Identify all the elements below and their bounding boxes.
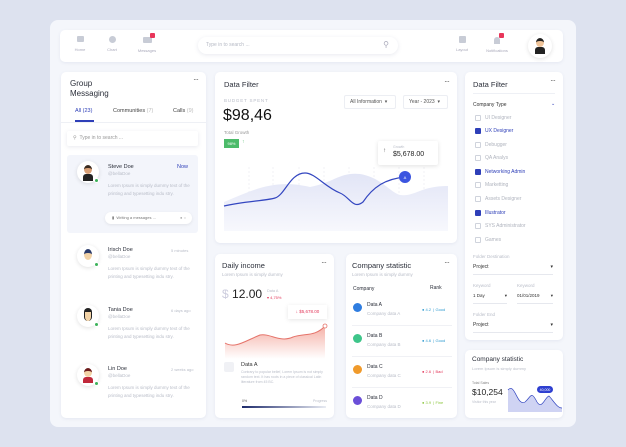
growth tooltip: $5,678.00 bbox=[393, 151, 424, 158]
message: Irisch Doe: Lorem Ipsum is simply dummy text of the printing and typesetting indu stry. bbox=[108, 266, 190, 279]
panel: data filter chart: Year - 2023 ▾ bbox=[409, 99, 440, 105]
message: Irisch Doe: @bellaDoe bbox=[108, 254, 130, 259]
panel: data filter chart bbox=[215, 72, 457, 243]
panel: daily income: Data A bbox=[267, 289, 278, 293]
mini chart: 40,000 bbox=[540, 388, 550, 392]
heading: Group bbox=[70, 79, 92, 88]
panel: data filter checklist: Data Filter bbox=[473, 80, 508, 89]
panel: company statistic mini: Lorem Ipsum is simply dummy bbox=[472, 366, 526, 371]
panel: group messaging bbox=[61, 72, 206, 418]
panel: company statistic table bbox=[346, 254, 457, 418]
tabs: Calls (9) bbox=[173, 108, 194, 114]
message: Tania Doe: Lorem Ipsum is simply dummy text of the printing and typesetting indu stry. bbox=[108, 326, 190, 339]
row: data C: Data C bbox=[367, 364, 383, 370]
panel: company statistic mini bbox=[465, 350, 563, 418]
checkbox list: UI Designer bbox=[485, 115, 511, 121]
panel: data filter chart: ··· bbox=[444, 77, 449, 86]
checkbox list: Games bbox=[485, 237, 501, 243]
search field: ⚲ Type in to search ... bbox=[73, 135, 123, 141]
line chart: A bbox=[404, 175, 407, 180]
data A info bbox=[224, 362, 234, 372]
user avatar bbox=[528, 34, 552, 58]
panel: data filter checklist: Project bbox=[473, 264, 489, 270]
panel: data filter chart: 98% bbox=[227, 141, 236, 146]
tabs bbox=[61, 105, 206, 123]
panel: data filter checklist: ▾ bbox=[550, 322, 553, 328]
panel: company statistic table: Rank bbox=[430, 285, 442, 291]
row: data A: ● 4.2 | Good bbox=[422, 307, 445, 312]
checkbox list: Networking Admin bbox=[485, 169, 525, 175]
panel: daily income: Contrary to popular belief, Lorem Ipsum is not simply random text. It has roots in a piece of classical Latin literature from 45 BC. bbox=[241, 370, 323, 384]
nav: notifications bbox=[486, 33, 508, 53]
panel: data filter checklist: 01/01/2019 bbox=[517, 293, 540, 298]
search box bbox=[198, 37, 398, 54]
panel: daily income: Lorem Ipsum is simply dummy bbox=[222, 272, 283, 277]
panel: data filter chart: Total Growth bbox=[224, 130, 249, 135]
panel: data filter checklist: ▾ bbox=[551, 293, 553, 298]
panel: daily income: Daily income bbox=[222, 261, 265, 270]
checkbox list: SYS Administrator bbox=[485, 223, 526, 229]
panel: company statistic table: ··· bbox=[444, 258, 449, 267]
panel: group messaging: ··· bbox=[193, 75, 198, 84]
message: Lin Doe bbox=[76, 366, 194, 398]
row: data B: Data B bbox=[367, 333, 382, 339]
growth tooltip: ↑ bbox=[383, 148, 386, 154]
reply input: ▮ Writing a messages ... bbox=[112, 215, 156, 220]
panel: daily income bbox=[215, 254, 334, 418]
panel: data filter checklist: ▾ bbox=[505, 293, 507, 298]
search field bbox=[67, 131, 198, 146]
row: data D: Company data D bbox=[367, 404, 401, 409]
panel: company statistic table: Lorem Ipsum is simply dummy bbox=[352, 272, 413, 277]
nav: notifications: Notifications bbox=[486, 48, 508, 53]
message: Tania Doe: 6 days ago bbox=[171, 308, 191, 313]
panel: data filter checklist: ··· bbox=[550, 76, 555, 85]
panel: data filter checklist: Project bbox=[473, 322, 489, 328]
row: data D: ● 3.9 | Fine bbox=[422, 400, 443, 405]
line chart bbox=[224, 167, 448, 230]
main container bbox=[50, 20, 576, 427]
message: Lin Doe: Lin Doe bbox=[108, 366, 127, 372]
keywords: Keyword bbox=[473, 283, 491, 288]
dropdowns: All Information ▾ bbox=[350, 99, 387, 105]
panel: company statistic mini: $10,254 bbox=[472, 387, 503, 397]
row: data B: Company data B bbox=[367, 342, 401, 347]
row: data A: Data A bbox=[367, 302, 382, 308]
message: Lin Doe: @bellaDoe bbox=[108, 373, 130, 378]
message: Steve Doe (active) bbox=[67, 155, 198, 233]
message: Tania Doe bbox=[76, 307, 191, 339]
checkbox list bbox=[475, 115, 526, 243]
message: Steve Doe (active): Steve Doe bbox=[108, 164, 134, 170]
tabs: All (23) bbox=[75, 108, 92, 114]
heading: Messaging bbox=[70, 89, 109, 98]
panel: data filter checklist bbox=[465, 72, 563, 340]
checkbox list: UX Designer bbox=[485, 128, 513, 134]
panel: data filter chart: ↑ bbox=[242, 139, 244, 145]
message: Irisch Doe bbox=[76, 247, 190, 279]
amount: $ 12.00 bbox=[222, 287, 262, 301]
row: data A bbox=[352, 302, 452, 326]
growth tooltip: Growth bbox=[393, 145, 404, 149]
reply input: ● ○ bbox=[180, 215, 186, 220]
panel: company statistic table: Company statistic bbox=[352, 261, 411, 270]
budget spent: BUDGET SPENT bbox=[224, 98, 269, 103]
panel: company statistic mini: Company statistic bbox=[472, 356, 523, 363]
search box: ⚲ bbox=[383, 40, 389, 49]
growth tooltip bbox=[378, 141, 438, 165]
folder end: Folder End bbox=[473, 312, 495, 317]
row: data A: Company data A bbox=[367, 311, 400, 316]
tabs: Communities (7) bbox=[113, 108, 153, 114]
panel: data filter checklist: ▾ bbox=[550, 264, 553, 270]
message: Lin Doe: Lorem Ipsum is simply dummy text of the printing and typesetting indu stry. bbox=[108, 385, 190, 398]
nav: home: Home bbox=[75, 47, 85, 52]
row: data C: Company data C bbox=[367, 373, 401, 378]
top navigation bar bbox=[60, 30, 563, 62]
income tooltip bbox=[288, 305, 327, 319]
panel: data filter chart: $98,46 bbox=[223, 107, 272, 124]
nav: messages bbox=[138, 33, 156, 53]
nav: layout bbox=[456, 36, 468, 52]
message: Steve Doe (active): Now bbox=[177, 164, 188, 170]
message: Irisch Doe: 5 minutes bbox=[171, 248, 188, 253]
panel: company statistic mini: Total Sales bbox=[472, 381, 489, 385]
progress bar: 0% bbox=[242, 399, 247, 403]
message: Lin Doe: 2 weeks ago bbox=[171, 367, 193, 372]
reply input bbox=[105, 212, 192, 224]
nav: messages: Messages bbox=[138, 48, 156, 53]
panel: daily income: ··· bbox=[321, 258, 326, 267]
panel: company statistic mini: Visitor this year bbox=[472, 400, 496, 404]
message: Tania Doe: Tania Doe bbox=[108, 307, 133, 313]
message: Irisch Doe: Irisch Doe bbox=[108, 247, 133, 253]
panel: data filter chart: Data Filter bbox=[224, 80, 259, 89]
folder destination: Folder Destination bbox=[473, 254, 510, 259]
row: data B: ● 4.6 | Good bbox=[422, 338, 445, 343]
checkbox list: Illustrator bbox=[485, 210, 506, 216]
checkbox list: Debugger bbox=[485, 142, 507, 148]
row: data C bbox=[352, 364, 452, 388]
row: data B bbox=[352, 333, 452, 357]
row: data D bbox=[353, 395, 443, 409]
checkbox list: QA Analys bbox=[485, 155, 508, 161]
panel: company statistic table: Company bbox=[353, 286, 374, 292]
search box: Type in to search ... bbox=[206, 42, 250, 48]
message: Steve Doe (active): Lorem Ipsum is simply dummy text of the printing and typesetting indu stry. bbox=[108, 183, 190, 196]
row: data D: Data D bbox=[367, 395, 383, 401]
dropdowns bbox=[344, 95, 396, 109]
panel: data filter checklist: Company Type bbox=[473, 102, 507, 108]
nav: chart bbox=[107, 36, 117, 52]
panel: daily income: Data A bbox=[241, 362, 258, 368]
checkbox list: Assets Designer bbox=[485, 196, 521, 202]
heading bbox=[70, 79, 109, 98]
panel: data filter checklist: ⌄ bbox=[551, 101, 555, 107]
nav: layout: Layout bbox=[456, 47, 468, 52]
panel: daily income: ▾ 4,75% bbox=[267, 295, 281, 300]
area chart bbox=[224, 324, 328, 356]
panel: data filter checklist: 1 Day bbox=[473, 293, 485, 298]
checkbox list: Marketting bbox=[485, 182, 508, 188]
panel: data filter checklist: Keyword bbox=[517, 283, 535, 288]
nav: chart: Chart bbox=[107, 47, 117, 52]
nav: home bbox=[74, 36, 86, 52]
row: data C: ● 2.6 | Bad bbox=[422, 369, 443, 374]
income tooltip: ↓ $5,678.00 bbox=[296, 309, 319, 314]
message: Tania Doe: @bellaDoe bbox=[108, 314, 130, 319]
mini chart bbox=[508, 386, 562, 412]
panel: daily income: Progress bbox=[313, 399, 327, 403]
message: Steve Doe (active): @bellaDoe bbox=[108, 171, 130, 176]
